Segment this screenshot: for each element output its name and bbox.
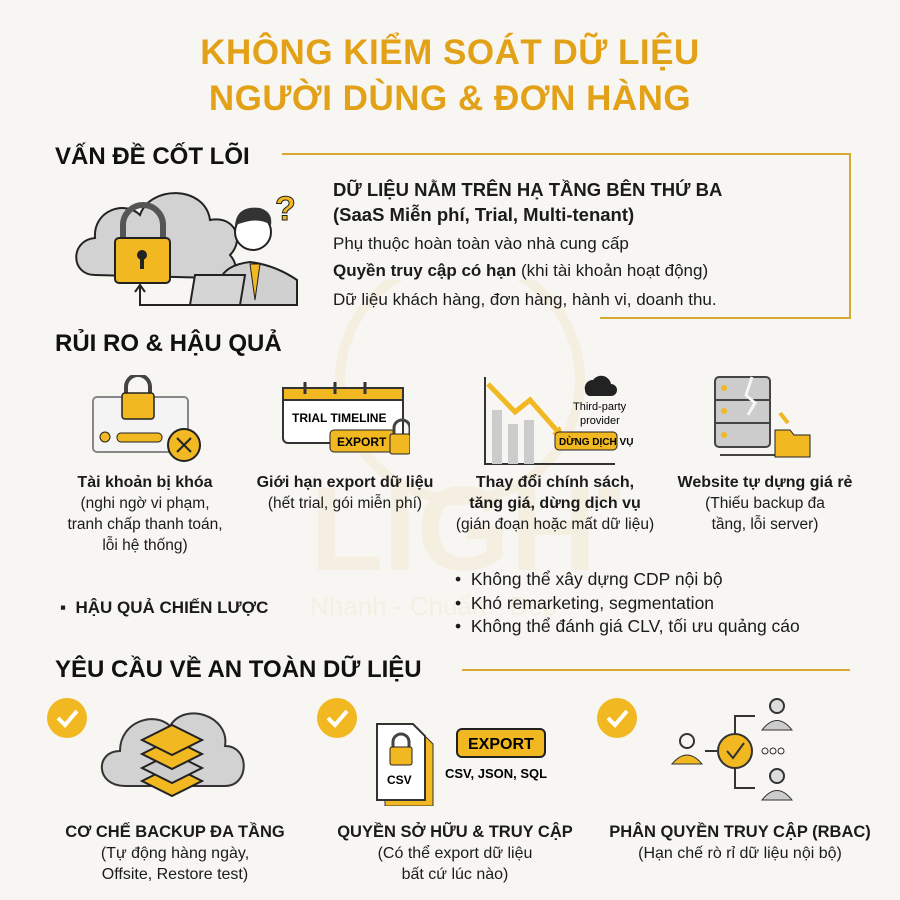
requirement 1: backup: CƠ CHẾ BACKUP ĐA TẦNG: [65, 823, 285, 841]
icon: cloud lock and person: [75, 190, 298, 306]
risk 1: account locked: lỗi hệ thống): [102, 537, 188, 554]
text block: core issue: [333, 179, 722, 309]
risk 3: policy change: DỪNG DỊCH VỤ: [559, 435, 633, 448]
text block: core issue: Quyền truy cập có hạn (khi tài khoản hoạt động): [333, 261, 708, 280]
risk 1: account locked: Tài khoản bị khóa: [77, 474, 213, 491]
strategic consequences label: ▪ HẬU QUẢ CHIẾN LƯỢC: [60, 598, 268, 617]
requirement 2: ownership: CSV, JSON, SQL: [445, 766, 547, 781]
risk 3: policy change: (gián đoạn hoặc mất dữ liệu): [456, 516, 654, 533]
risk 4: cheap website: tầng, lỗi server): [712, 516, 818, 533]
risk 2: export limit: Giới hạn export dữ liệu: [257, 474, 433, 491]
risk 1: account locked: tranh chấp thanh toán,: [67, 516, 223, 533]
requirement 3: RBAC: (Hạn chế rò rỉ dữ liệu nội bộ): [638, 845, 842, 862]
text block: core issue: Phụ thuộc hoàn toàn vào nhà cung cấp: [333, 234, 629, 253]
icon: cloud lock and person: ?: [275, 190, 296, 228]
requirement 2: ownership: (Có thể export dữ liệu: [378, 845, 532, 862]
text block: core issue: Dữ liệu khách hàng, đơn hàng, hành vi, doanh thu.: [333, 290, 717, 309]
watermark: Nhanh - Chuẩn - Đẹp: [310, 591, 557, 621]
requirement 2: ownership: EXPORT: [468, 736, 534, 753]
requirement 1: backup: Offsite, Restore test): [102, 866, 248, 883]
risk 1: account locked: [67, 375, 223, 554]
risk 1: account locked: (nghi ngờ vi phạm,: [80, 495, 210, 512]
requirement 1: backup: [47, 698, 285, 883]
title: KHÔNG KIỂM SOÁT DỮ LIỆU: [200, 33, 700, 72]
frame line: [282, 153, 851, 319]
requirement 2: ownership: QUYỀN SỞ HỮU & TRUY CẬP: [337, 823, 573, 841]
risk 3: policy change: Thay đổi chính sách,: [476, 474, 634, 491]
requirement 3: RBAC: PHÂN QUYỀN TRUY CẬP (RBAC): [609, 823, 871, 841]
requirement 2: ownership: [317, 698, 573, 883]
consequences bullets: [455, 569, 800, 636]
heading: requirements: YÊU CẦU VỀ AN TOÀN DỮ LIỆU: [55, 656, 422, 683]
risk 4: cheap website: [678, 376, 852, 533]
requirement 1: backup: (Tự động hàng ngày,: [101, 845, 249, 862]
title: NGƯỜI DÙNG & ĐƠN HÀNG: [209, 79, 691, 118]
risk 3: policy change: [456, 376, 654, 533]
risk 2: export limit: TRIAL TIMELINE: [292, 411, 386, 425]
consequences bullets: • Không thể đánh giá CLV, tối ưu quảng cáo: [455, 616, 800, 636]
risk 4: cheap website: Website tự dựng giá rẻ: [678, 474, 852, 491]
heading: risks: RỦI RO & HẬU QUẢ: [55, 330, 282, 357]
consequences bullets: • Không thể xây dựng CDP nội bộ: [455, 569, 723, 589]
risk 2: export limit: (hết trial, gói miễn phí): [268, 495, 422, 512]
requirement 2: ownership: bất cứ lúc nào): [402, 866, 508, 883]
heading: core issue: VẤN ĐỀ CỐT LÕI: [55, 143, 250, 170]
text block: core issue: DỮ LIỆU NẰM TRÊN HẠ TẦNG BÊN THỨ BA: [333, 179, 722, 200]
risk 2: export limit: [257, 382, 433, 512]
text block: core issue: (SaaS Miễn phí, Trial, Multi-tenant): [333, 204, 634, 225]
risk 4: cheap website: (Thiếu backup đa: [705, 495, 825, 512]
watermark: [310, 280, 620, 621]
risk 3: policy change: Third-party: [573, 401, 627, 413]
risk 3: policy change: provider: [580, 415, 620, 427]
title: [200, 32, 700, 118]
consequences bullets: • Khó remarketing, segmentation: [455, 592, 714, 612]
requirement 2: ownership: CSV: [387, 773, 412, 787]
risk 2: export limit: EXPORT: [337, 435, 387, 449]
risk 3: policy change: tăng giá, dừng dịch vụ: [469, 495, 641, 512]
requirement 3: RBAC: [597, 698, 871, 862]
